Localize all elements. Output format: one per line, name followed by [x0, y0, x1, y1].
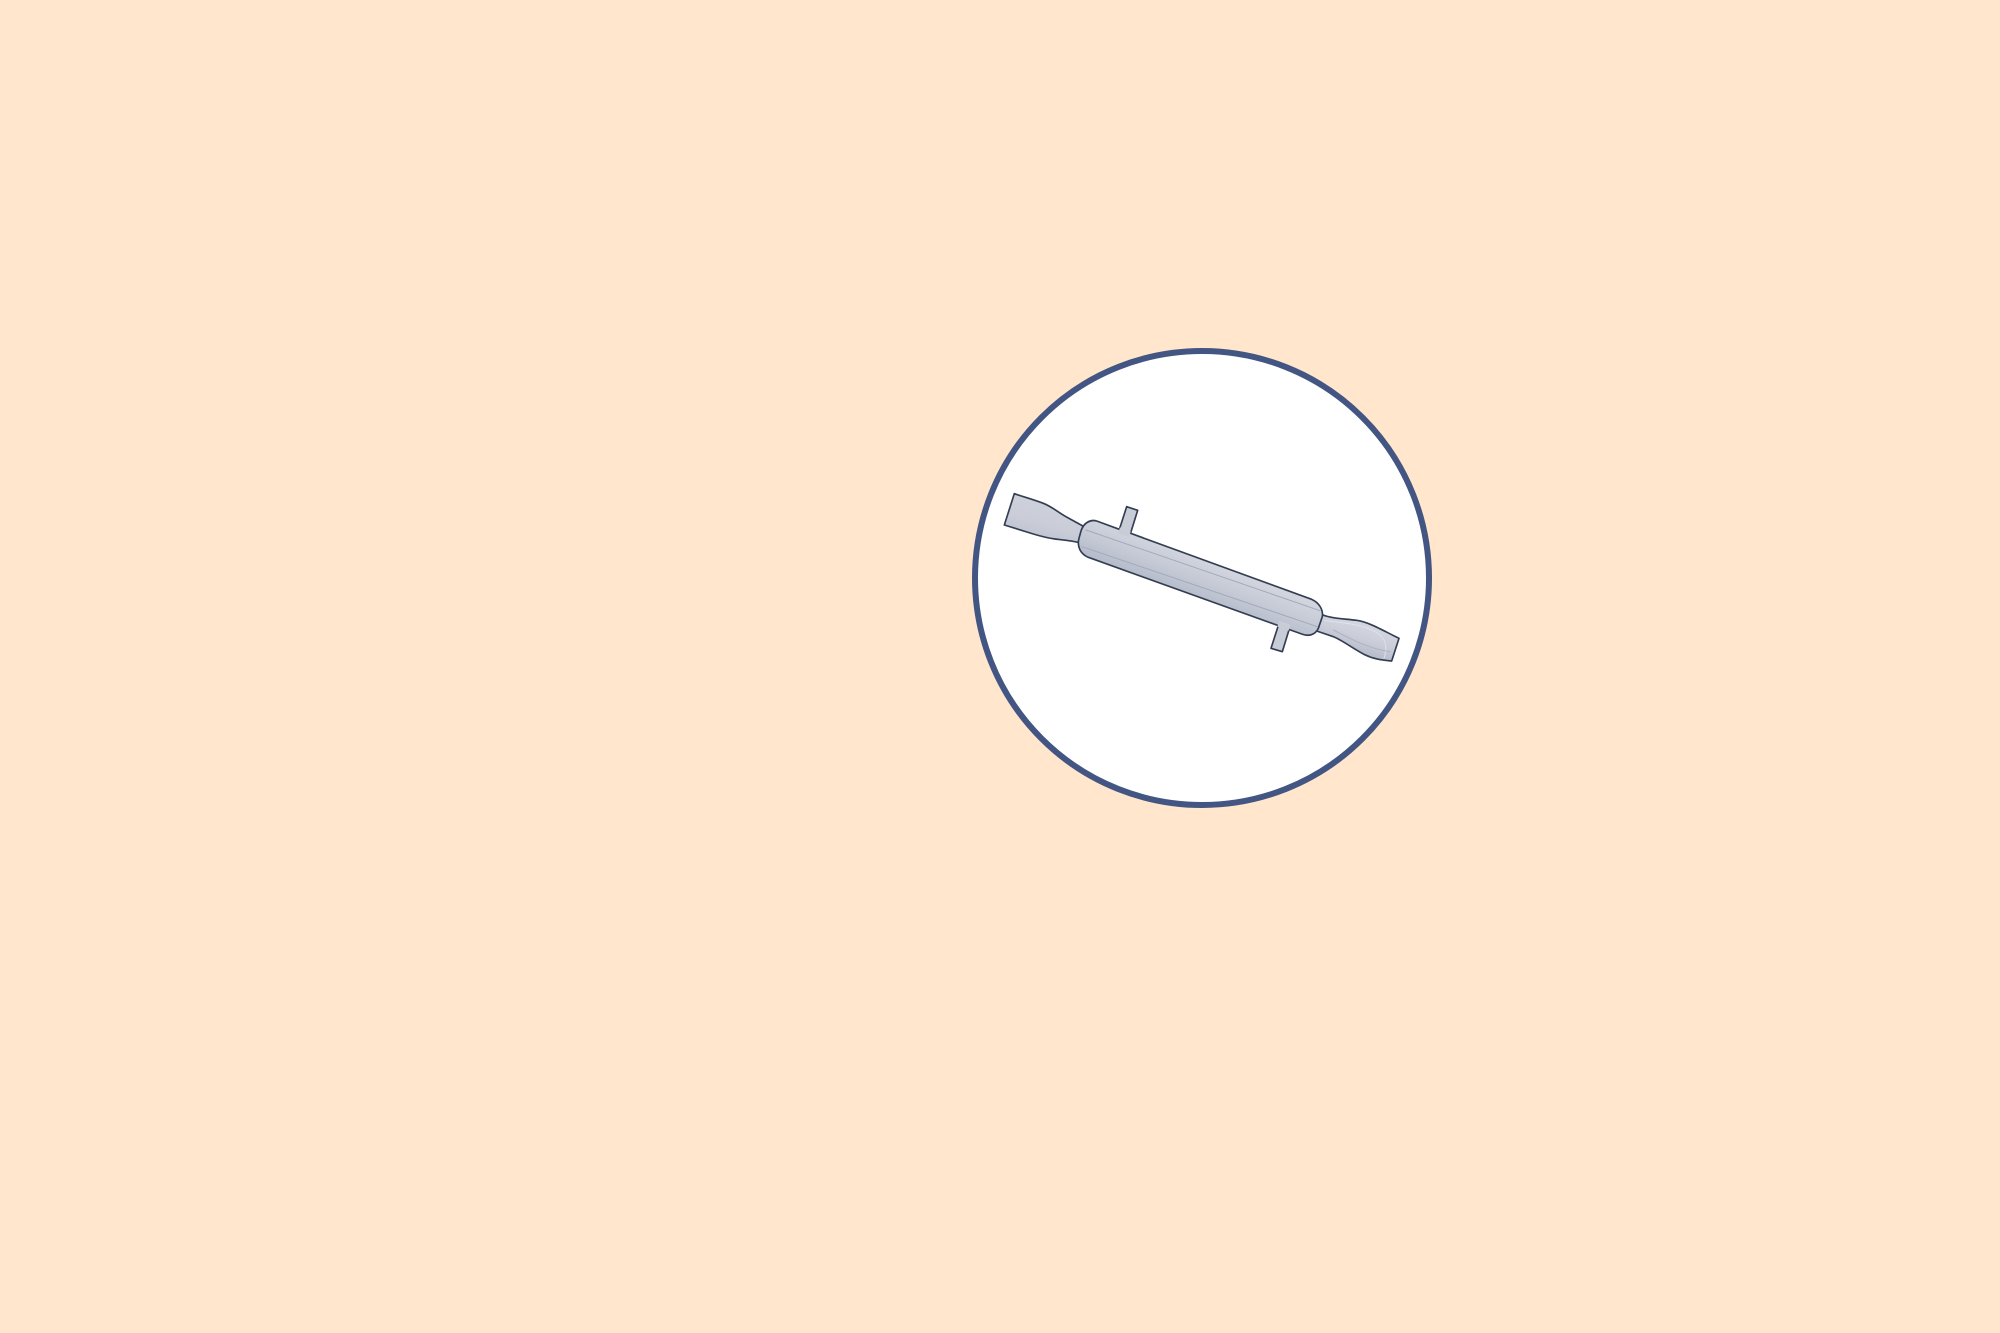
top side arm	[1119, 507, 1138, 535]
inner tube lines	[1082, 530, 1390, 658]
right flared end	[1317, 615, 1399, 661]
bottom side arm	[1271, 623, 1290, 652]
condenser jacket body	[1078, 521, 1322, 635]
left flared end	[1004, 494, 1084, 543]
badge circle	[975, 351, 1429, 805]
cover arm joints	[1118, 527, 1131, 537]
icon: circular badge with condenser tube	[975, 351, 1429, 805]
icon: glass condenser	[1004, 494, 1399, 661]
